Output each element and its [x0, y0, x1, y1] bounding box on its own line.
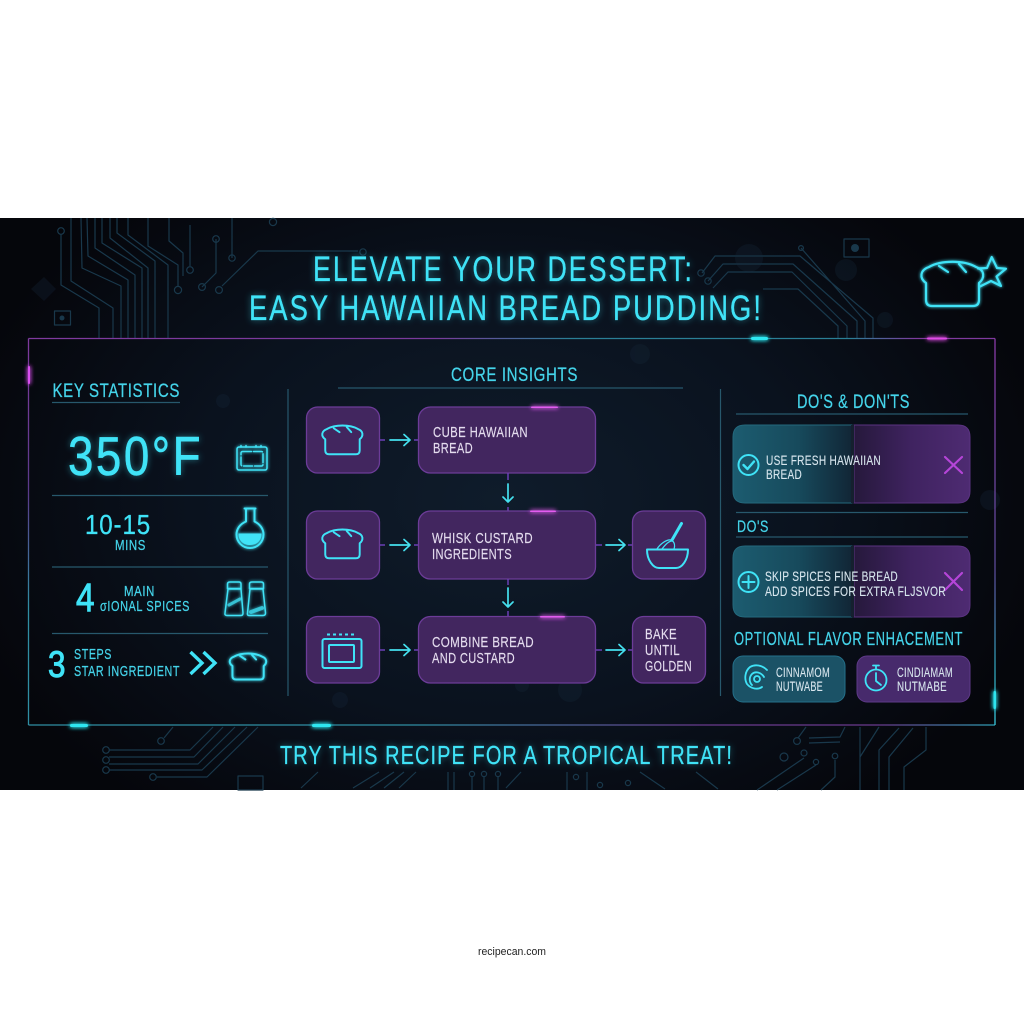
card: cinnamon nutmeg teal: CINNAMOM: [776, 665, 830, 680]
source credit: recipecan.com: [478, 946, 546, 958]
icon: cross: [945, 457, 962, 473]
heading: key statistics: KEY STATISTICS: [52, 380, 180, 402]
heading: core insights: CORE INSIGHTS: [451, 364, 578, 386]
flow row 3: combine and bake: AND CUSTARD: [432, 650, 515, 667]
call to action: TRY THIS RECIPE FOR A TROPICAL TREAT!: [280, 740, 733, 770]
icon: flask: [236, 508, 264, 548]
stat: 10-15 mins: MINS: [115, 537, 146, 554]
heading: do's and don'ts: DO'S & DON'TS: [797, 391, 910, 413]
icon: spice swirl: [745, 665, 767, 689]
icon: timer: [866, 666, 886, 690]
icon: oven: [237, 446, 267, 470]
icon: whisk and bowl: [647, 524, 688, 568]
card: use fresh bread: [733, 425, 970, 503]
card: use fresh bread: BREAD: [766, 466, 802, 482]
panel: key statistics: [48, 380, 268, 685]
arrow: down to row 2: [503, 473, 513, 511]
stat: 4 main spices: [76, 576, 190, 620]
card: cinnamon nutmeg teal: NUTWABE: [776, 679, 823, 694]
panel: do's and don'ts: [733, 391, 970, 702]
card: use fresh bread: USE FRESH HAWAIIAN: [766, 452, 881, 468]
stat: 3 steps, star ingredient: STEPS: [74, 646, 112, 663]
frame glow accents: [28, 337, 996, 727]
icon: bread with star: [921, 257, 1006, 306]
flow row 2: whisk custard: WHISK CUSTARD: [432, 530, 533, 547]
flow row 3: combine and bake: UNTIL: [645, 642, 680, 659]
stat: 10-15 mins: 10-15: [85, 509, 151, 540]
background circuit traces: [31, 218, 1000, 790]
main panel frame: [28, 338, 995, 725]
stat: 3 steps, star ingredient: STAR INGREDIENT: [74, 663, 180, 680]
flow row 1: cube bread: BREAD: [433, 440, 473, 457]
card: cinnamon nutmeg teal: [733, 656, 845, 702]
icon: oven: [322, 634, 362, 668]
arrow: down to row 3: [503, 579, 513, 616]
icon: bread: [230, 653, 266, 680]
icon: check: [738, 455, 758, 475]
flow row 3: combine and bake: GOLDEN: [645, 658, 692, 675]
stat: 4 main spices: MAIN: [124, 584, 155, 600]
title: ELEVATE YOUR DESSERT:: [313, 250, 694, 289]
flow row 3: combine and bake: COMBINE BREAD: [432, 634, 534, 651]
card: add spices: SKIP SPICES FINE BREAD: [765, 568, 898, 584]
icon: double chevron: [190, 652, 215, 674]
card: add spices: ADD SPICES FOR EXTRA FLJSVOR: [765, 583, 946, 599]
stat: 4 main spices: σIONAL SPICES: [100, 599, 190, 615]
icon: plus: [738, 572, 758, 592]
card: cinnamon nutmeg purple: CINDIAMAM: [897, 665, 953, 680]
title: [249, 250, 763, 328]
flow row 1: cube bread: [306, 406, 596, 473]
icon: salt and pepper shakers: [225, 582, 266, 616]
card: cinnamon nutmeg purple: [857, 656, 970, 702]
flow row 3: combine and bake: [306, 616, 706, 683]
stat: 10-15 mins: [85, 509, 151, 554]
title: EASY HAWAIIAN BREAD PUDDING!: [249, 289, 763, 328]
sub-heading: do's: DO'S: [737, 517, 769, 536]
stat: 3 steps, star ingredient: 3: [48, 644, 66, 685]
stat: 4 main spices: 4: [76, 576, 94, 620]
flow row 2: whisk custard: INGREDIENTS: [432, 546, 512, 563]
panel: core insights: [306, 364, 706, 683]
card: add spices: [733, 546, 970, 617]
flow row 2: whisk custard: [306, 510, 706, 579]
icon: cross: [945, 573, 962, 590]
flow row 3: combine and bake: BAKE: [645, 626, 677, 643]
card: cinnamon nutmeg purple: NUTMABE: [897, 679, 947, 694]
dark banner background: [0, 218, 1024, 790]
stat: 350°F: 350°F: [68, 425, 203, 487]
flow row 1: cube bread: CUBE HAWAIIAN: [433, 424, 528, 441]
stat: 3 steps, star ingredient: [48, 644, 180, 685]
